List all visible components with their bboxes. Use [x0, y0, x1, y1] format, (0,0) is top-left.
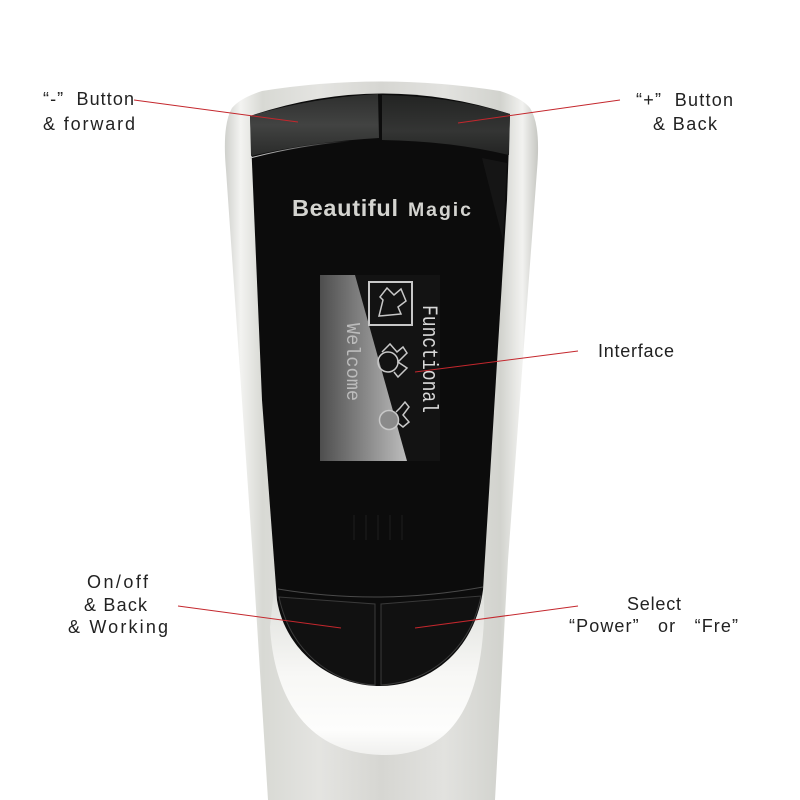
label: select: “Power” or “Fre” — [569, 616, 738, 636]
bottom buttons — [278, 587, 483, 685]
vent lines — [354, 515, 402, 540]
button gap highlight — [250, 141, 350, 158]
top left button — [250, 94, 379, 156]
icon: circle with cross — [378, 344, 407, 377]
label: plus button — [636, 90, 733, 134]
brand text: Magic — [408, 199, 471, 221]
screen text: Welcome: Welcome — [341, 323, 363, 401]
label: minus button — [43, 89, 135, 134]
label: on/off: & Working — [68, 617, 168, 637]
label: plus button: & Back — [653, 114, 718, 134]
label: on/off: On/off — [87, 572, 149, 592]
screen — [320, 275, 441, 461]
device body — [225, 82, 538, 800]
label: minus button: & forward — [43, 114, 135, 134]
label: minus button: “-” Button — [43, 89, 134, 109]
label: on/off — [68, 572, 168, 637]
label: select: Select — [627, 594, 681, 614]
icon: dotted circle with cross — [380, 402, 409, 430]
icon: selected box — [369, 282, 412, 325]
brand text — [292, 195, 471, 221]
label: plus button: “+” Button — [636, 90, 733, 110]
lower cove — [270, 590, 484, 755]
label: interface: Interface — [598, 341, 674, 361]
label: on/off: & Back — [84, 595, 148, 615]
screen glare — [482, 158, 507, 240]
control panel — [250, 93, 510, 686]
brand text: Beautiful — [292, 195, 398, 221]
label: select — [569, 594, 738, 636]
screen text: Functional: Functional — [416, 305, 441, 413]
leader lines — [134, 100, 620, 628]
top right button — [382, 95, 510, 155]
